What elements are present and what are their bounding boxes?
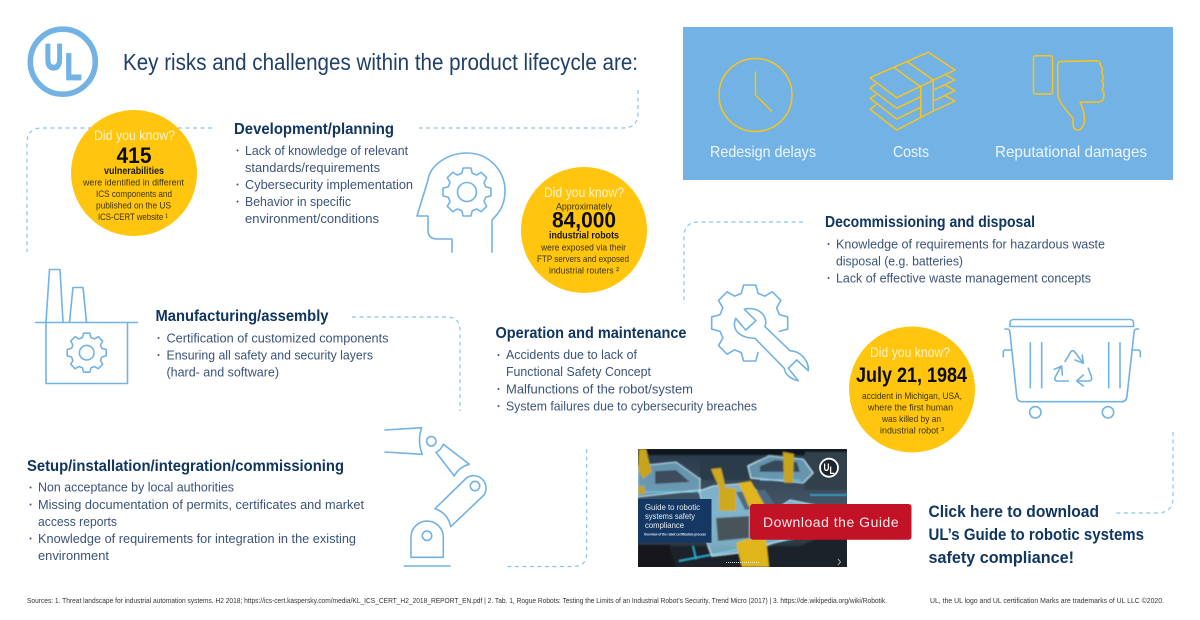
section: development/planning: standards/requirements [245,160,380,175]
title: Key risks and challenges within the product lifecycle are: [123,49,638,75]
callout: 415 vulnerabilities: ICS components and [96,189,172,200]
section: setup/installation/integration/commissioning: Non acceptance by local authorities [38,480,234,494]
cover title box: Overview of the robot certification process [644,532,706,536]
callout: July 21, 1984: industrial robot ³ [880,426,944,436]
section: development/planning: Lack of knowledge of relevant [245,143,408,158]
callout: 415 vulnerabilities: published on the US [96,200,171,212]
callout: 415 vulnerabilities: Did you know? [94,127,175,143]
section: decommissioning and disposal [825,214,1105,286]
section: development/planning: Behavior in specific [245,194,351,209]
icon: gear and wrench [712,285,808,381]
call to action [928,502,1144,567]
callout: 84,000 robots: were exposed via their [540,242,626,254]
connector: dashed paths [27,90,1173,566]
callout: 415 vulnerabilities: 415 [116,143,152,168]
callout: July 21, 1984 [849,326,975,452]
button: download the guide [750,504,912,540]
callout: 84,000 robots: Approximately [556,202,612,212]
callout: July 21, 1984: July 21, 1984 [856,364,967,387]
callout: July 21, 1984: where the first human [867,402,953,414]
cover title box [638,499,712,543]
panel: consequences [683,27,1173,180]
section: development/planning [234,121,413,226]
icon: head with gear [417,153,505,252]
icon: thumbs down [1034,56,1104,130]
section: decommissioning and disposal: Lack of effective waste management concepts [836,270,1091,286]
callout: 415 vulnerabilities: ICS-CERT website ¹ [98,212,168,223]
section: operation and maintenance: Malfunctions of the robot/system [506,382,693,396]
footer: trademark: UL, the UL logo and UL certification Marks are trademarks of UL LLC ©2020. [930,596,1164,605]
label: redesign delays: Redesign delays [710,144,816,161]
section: development/planning: Cybersecurity implementation [245,177,413,192]
call to action: UL’s Guide to robotic systems [928,525,1144,544]
icon: recycling bin [1003,320,1140,418]
UL mark: L [830,465,835,477]
cover title box: compliance [645,520,684,530]
section: operation and maintenance: Functional Safety Concept [506,364,651,379]
section: decommissioning and disposal: Knowledge of requirements for hazardous waste [836,236,1105,252]
section: operation and maintenance: Accidents due to lack of [506,347,637,362]
UL mark: U [824,462,830,474]
callout: July 21, 1984: Did you know? [870,344,950,360]
button: download the guide: Download the Guide [763,514,899,530]
logo: UL: U [44,36,63,78]
callout: 415 vulnerabilities [71,110,197,236]
callout: 84,000 robots: Did you know? [544,184,624,200]
callout: 415 vulnerabilities: vulnerabilities [104,166,164,177]
call to action: safety compliance! [928,548,1074,567]
section: setup/installation/integration/commissioning: Setup/installation/integration/commissioning [27,458,344,475]
cover title box: Guide to robotic [645,502,700,512]
label: costs: Costs [893,144,929,161]
section: operation and maintenance: Operation and maintenance [496,325,687,342]
section: setup/installation/integration/commissioning: Knowledge of requirements for integration in the existing [38,531,356,546]
icon: robot arm [385,428,486,566]
section: operation and maintenance [496,325,757,414]
section: manufacturing/assembly: (hard- and software) [166,364,279,380]
callout: 84,000 robots: industrial routers ² [549,266,619,276]
section: manufacturing/assembly [156,308,389,380]
label: reputational damages: Reputational damages [995,144,1147,161]
section: development/planning: environment/conditions [245,211,379,226]
section: manufacturing/assembly: Certification of customized components [166,330,389,346]
UL mark [820,459,838,477]
footer: sources: Sources: 1. Threat landscape for industrial automation systems. H2 2018; https://ics-cert.kaspersky.com/media/KL_ICS_CERT_H2_2018_REPORT_EN.pdf | 2. Tab. 1, Rogue Robots: Testing the Limits of an Industrial Robot’s Security, Trend Micro (2017) | 3. https://de.wikipedia.org/wiki/Robotik. [27,596,887,605]
section: decommissioning and disposal: disposal (e.g. batteries) [836,254,963,268]
callout: 415 vulnerabilities: were identified in different [82,178,184,188]
image: guide cover [638,449,847,567]
section: operation and maintenance: System failures due to cybersecurity breaches [506,398,757,414]
logo: UL [30,29,95,94]
cover title box: systems safety [645,511,696,521]
callout: July 21, 1984: was killed by an [881,414,941,425]
icon: factory with gear [36,270,138,384]
callout: 84,000 robots: FTP servers and exposed [537,254,629,265]
call to action: Click here to download [928,502,1099,521]
icon: stack of money [870,52,955,130]
callout: 84,000 robots: 84,000 [552,208,616,232]
callout: 84,000 robots: industrial robots [549,230,619,242]
logo: UL: L [65,46,82,88]
section: setup/installation/integration/commissioning: access reports [38,514,117,529]
section: manufacturing/assembly: Ensuring all safety and security layers [166,348,373,362]
callout: July 21, 1984: accident in Michigan, USA, [862,391,962,402]
section: setup/installation/integration/commissioning [27,458,364,563]
section: setup/installation/integration/commissioning: Missing documentation of permits, certificates and market [38,497,364,512]
section: development/planning: Development/planning [234,121,394,138]
callout: 84,000 robots [521,167,647,293]
section: decommissioning and disposal: Decommissioning and disposal [825,214,1035,231]
section: setup/installation/integration/commissioning: environment [38,548,109,563]
icon: clock [719,58,792,132]
section: manufacturing/assembly: Manufacturing/assembly [156,308,329,325]
